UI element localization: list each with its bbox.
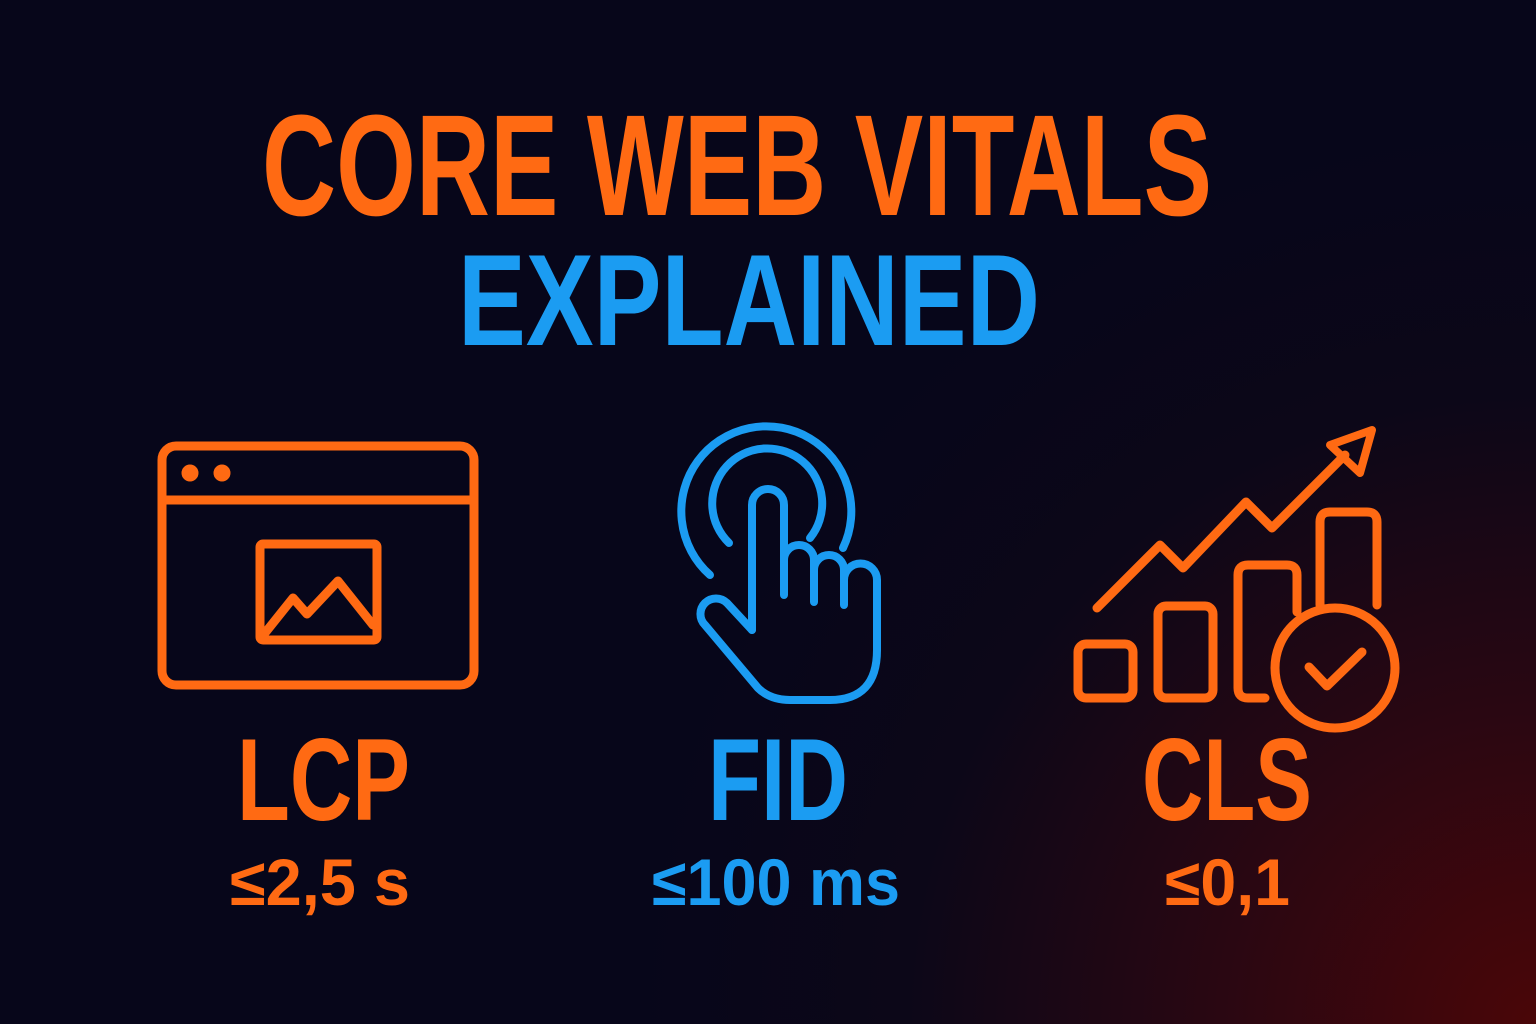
icon: browser window [162, 446, 474, 685]
label: FID: FID [708, 714, 848, 845]
icon: tapping hand [681, 426, 877, 700]
label: CLS: CLS [1142, 714, 1312, 845]
label: FID [652, 714, 900, 919]
title: EXPLAINED [458, 227, 1040, 373]
icon: chart with check [1078, 430, 1395, 728]
label: LCP [230, 714, 410, 919]
label: CLS [1142, 714, 1312, 919]
label: LCP: LCP [237, 714, 410, 845]
label: FID: ≤100 ms [652, 845, 900, 919]
label: LCP: ≤2,5 s [230, 845, 410, 919]
title [262, 85, 1212, 373]
label: CLS: ≤0,1 [1165, 845, 1290, 919]
